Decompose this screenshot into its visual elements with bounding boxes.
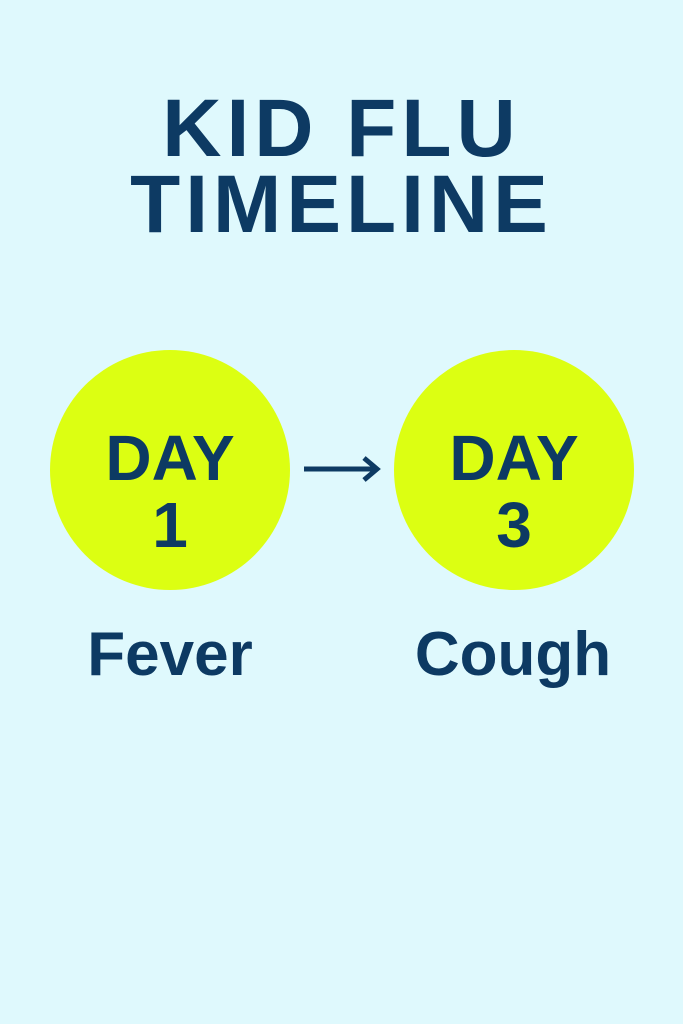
circle: day 1: 1 xyxy=(152,489,188,561)
circle: day 3 xyxy=(394,350,634,590)
title: KID FLU xyxy=(162,83,521,174)
title: TIMELINE xyxy=(130,159,553,250)
arrow xyxy=(304,456,381,482)
circle: day 1 xyxy=(50,350,290,590)
circle: day 3: DAY xyxy=(449,422,579,494)
label: cough: Cough xyxy=(415,620,611,689)
title xyxy=(130,83,553,250)
circle: day 3: 3 xyxy=(496,489,532,561)
circle: day 1: DAY xyxy=(105,422,235,494)
label: fever: Fever xyxy=(87,620,253,689)
